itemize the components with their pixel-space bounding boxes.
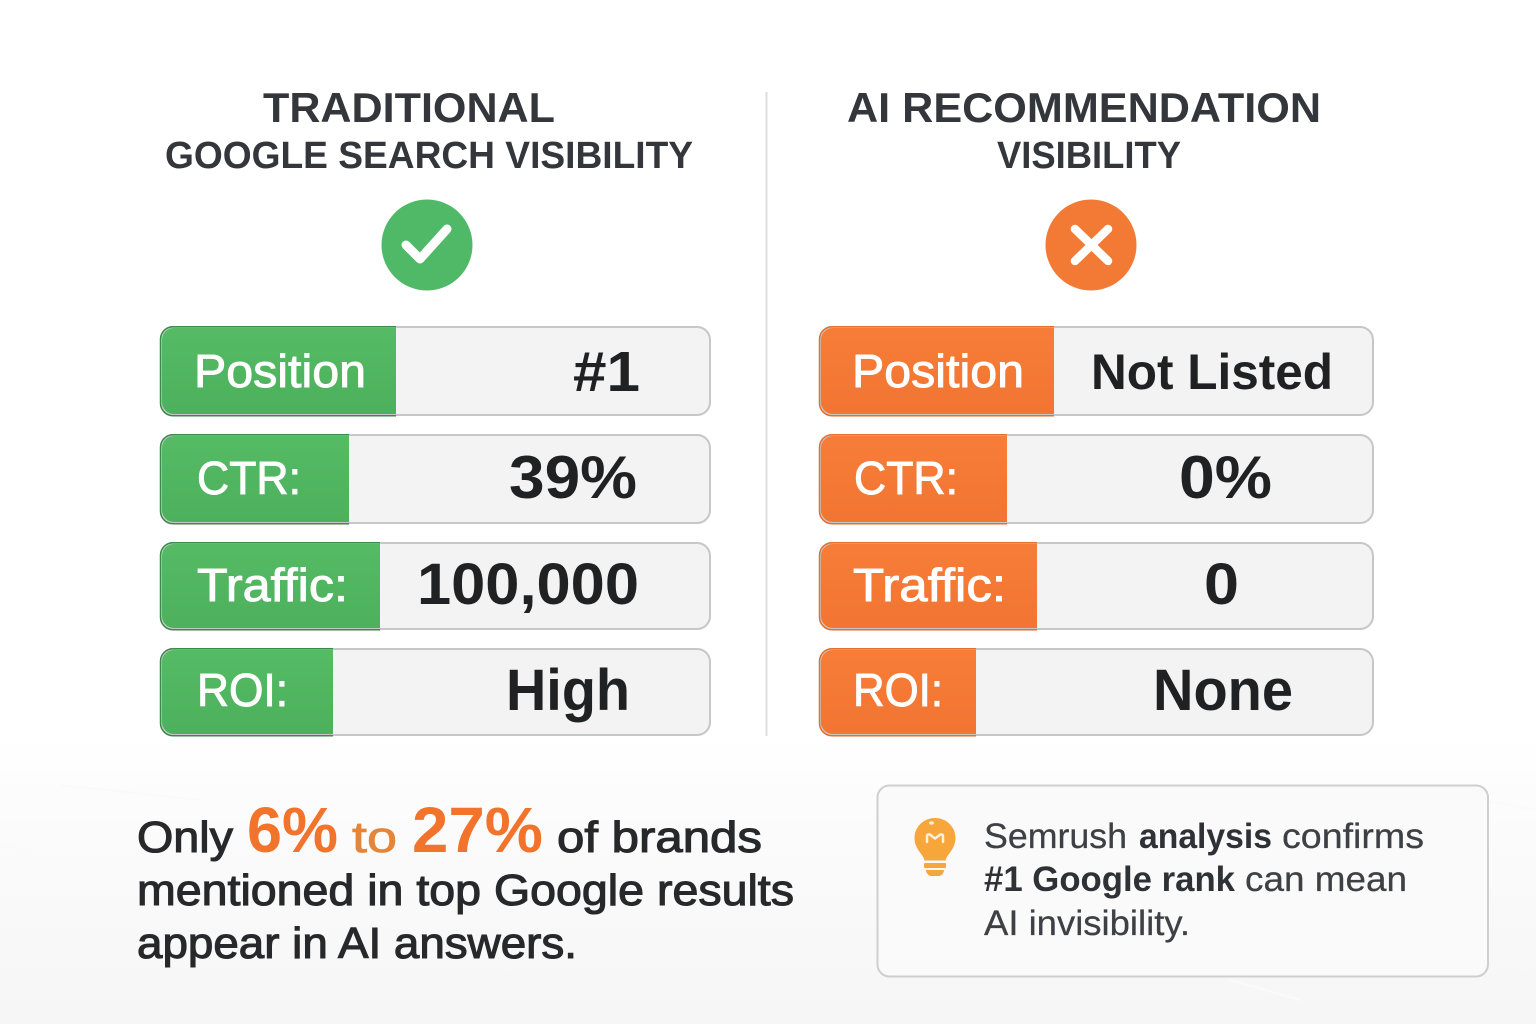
- text block: brand statistic: [137, 794, 794, 968]
- callout: semrush analysis: AI invisibility.: [984, 904, 1190, 943]
- row: traffic 0: 0: [1204, 552, 1239, 617]
- row: ctr 39%: [160, 434, 711, 524]
- panel: traditional metrics: [160, 326, 711, 736]
- row: roi high: ROI:: [197, 664, 288, 716]
- icon: orange cross: [1046, 200, 1136, 290]
- row: roi none: None: [1153, 658, 1293, 723]
- callout: semrush analysis: #1 Google rank: [984, 860, 1236, 899]
- callout: semrush analysis: Semrush: [984, 817, 1127, 856]
- text block: brand statistic: mentioned in top Google results: [137, 866, 794, 915]
- row: roi high: [160, 648, 711, 736]
- row: position #1: #1: [573, 340, 640, 404]
- row: roi high: High: [506, 658, 630, 723]
- heading: ai recommendation visibility: VISIBILITY: [997, 135, 1181, 177]
- heading: ai recommendation visibility: [847, 84, 1321, 177]
- heading: traditional google search visibility: [165, 84, 693, 177]
- row: position #1: [160, 326, 711, 416]
- callout: semrush analysis: [878, 786, 1488, 976]
- text block: brand statistic: to: [352, 813, 397, 862]
- callout: semrush analysis: analysis: [1139, 817, 1272, 856]
- row: traffic 100,000: Traffic:: [197, 559, 348, 611]
- text block: brand statistic: Only: [137, 813, 233, 862]
- row: position not listed: Position: [852, 345, 1024, 397]
- text block: brand statistic: 27%: [412, 794, 543, 866]
- callout: semrush analysis: confirms: [1282, 817, 1424, 856]
- heading: traditional google search visibility: GOOGLE SEARCH VISIBILITY: [165, 135, 693, 177]
- icon: green check: [382, 200, 472, 290]
- row: position not listed: Not Listed: [1091, 344, 1333, 400]
- row: traffic 100,000: 100,000: [417, 552, 639, 617]
- text block: brand statistic: 6%: [247, 794, 338, 866]
- heading: traditional google search visibility: TRADITIONAL: [263, 84, 555, 131]
- row: ctr 0%: [819, 434, 1374, 524]
- row: roi none: [819, 648, 1374, 736]
- row: traffic 0: Traffic:: [853, 559, 1006, 611]
- heading: ai recommendation visibility: AI RECOMMENDATION: [847, 84, 1321, 131]
- row: traffic 100,000: [160, 542, 711, 630]
- row: traffic 0: [819, 542, 1374, 630]
- icon: lightbulb: [914, 818, 956, 876]
- row: ctr 39%: 39%: [509, 444, 637, 511]
- text block: brand statistic: of brands: [557, 813, 762, 862]
- row: ctr 0%: CTR:: [854, 452, 958, 504]
- panel: ai recommendation metrics: [819, 326, 1374, 736]
- row: roi none: ROI:: [853, 664, 943, 716]
- row: ctr 39%: CTR:: [197, 452, 301, 504]
- text block: brand statistic: appear in AI answers.: [137, 919, 577, 968]
- row: position not listed: [819, 326, 1374, 416]
- row: position #1: Position: [194, 345, 366, 397]
- callout: semrush analysis: can mean: [1245, 860, 1407, 899]
- row: ctr 0%: 0%: [1179, 444, 1272, 511]
